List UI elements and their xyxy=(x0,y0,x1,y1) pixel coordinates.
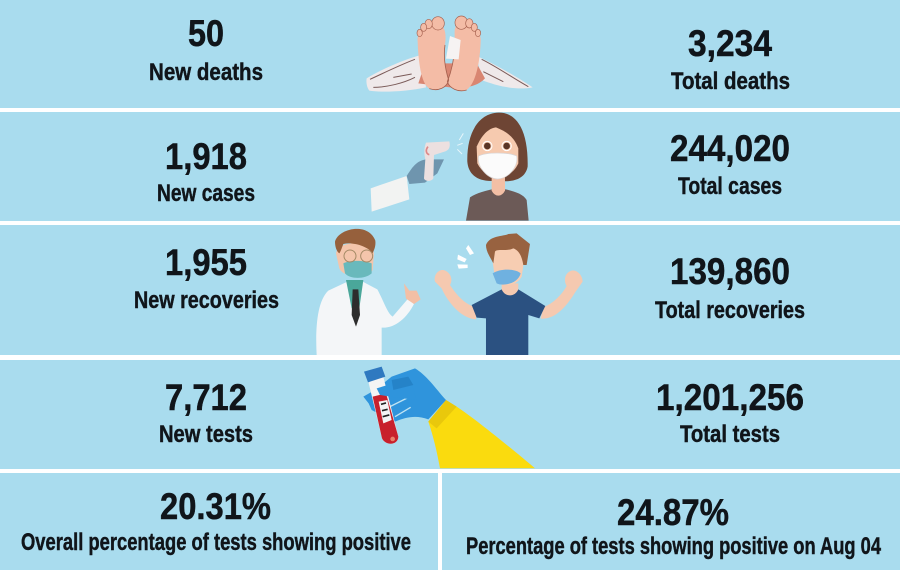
total tests label: Total tests xyxy=(680,421,780,448)
icon: feet with toe tag xyxy=(366,16,533,92)
total recoveries figure: 139,860 xyxy=(670,251,790,292)
new cases label: New cases xyxy=(157,180,255,207)
panel: overall positivity xyxy=(0,473,438,570)
icon: doctor and recovered patient xyxy=(316,229,583,355)
new tests label: New tests xyxy=(159,421,253,448)
total cases label: Total cases xyxy=(678,173,782,200)
total deaths label: Total deaths xyxy=(671,68,790,95)
Aug 04 percentage figure: 24.87% xyxy=(617,492,729,533)
panel: tests xyxy=(0,360,900,469)
panel: recoveries xyxy=(0,225,900,355)
panel: positivity on Aug 04 xyxy=(442,473,900,570)
new tests figure: 7,712 xyxy=(165,377,247,418)
total cases figure: 244,020 xyxy=(670,128,790,169)
total recoveries label: Total recoveries xyxy=(655,297,805,324)
total deaths figure: 3,234 xyxy=(688,23,772,64)
icon: temperature check on masked woman xyxy=(371,113,529,221)
panel: deaths xyxy=(0,0,900,108)
new cases figure: 1,918 xyxy=(165,136,247,177)
icon: gloved hand holding blood test tube xyxy=(363,367,535,468)
overall percentage figure: 20.31% xyxy=(160,486,271,527)
new recoveries label: New recoveries xyxy=(134,287,279,314)
new recoveries figure: 1,955 xyxy=(165,242,247,283)
total tests figure: 1,201,256 xyxy=(656,377,804,418)
panel: cases xyxy=(0,112,900,221)
new deaths label: New deaths xyxy=(149,59,263,86)
overall percentage label: Overall percentage of tests showing positive xyxy=(21,529,411,556)
new deaths figure: 50 xyxy=(188,13,224,54)
